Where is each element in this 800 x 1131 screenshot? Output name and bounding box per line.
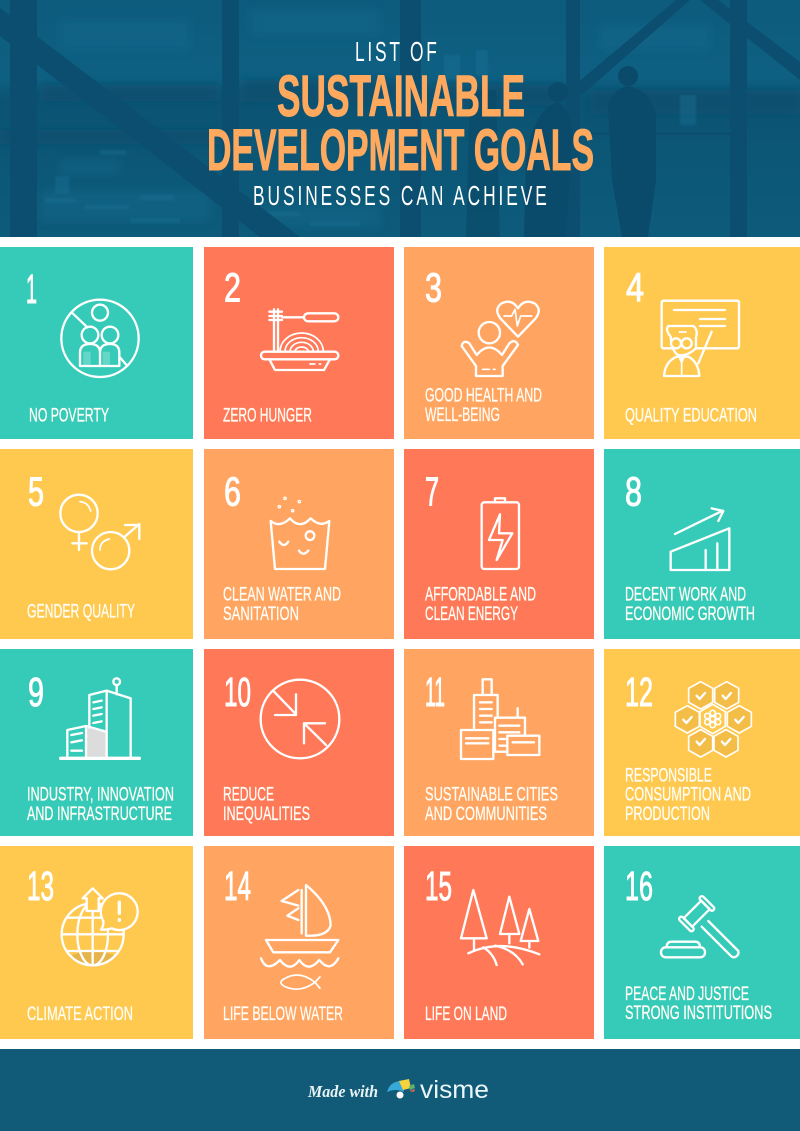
number 14: 14 — [224, 863, 251, 909]
label: RESPONSIBLE — [625, 766, 712, 787]
card 12: responsible consumption and production — [604, 649, 800, 836]
icon: crossed-out people — [61, 300, 139, 377]
label line 2: AND INFRASTRUCTURE — [27, 804, 172, 825]
label: SUSTAINABLE CITIES — [425, 785, 558, 806]
label: GOOD HEALTH AND — [425, 386, 542, 407]
card 16: peace and justice strong institutions — [604, 846, 800, 1039]
card 9: industry, innovation and infrastructure — [0, 649, 193, 836]
card 11: sustainable cities and communities: 11 — [425, 669, 445, 715]
title line: list of: LIST OF — [355, 36, 437, 67]
silhouettes of two people — [466, 66, 656, 237]
label: GENDER QUALITY — [27, 602, 135, 623]
number 6: 6 — [224, 468, 241, 514]
label: LIFE ON LAND — [425, 1004, 507, 1025]
icon: person and heart — [462, 302, 539, 376]
label: INDUSTRY, INNOVATION — [27, 785, 174, 806]
footer bar — [0, 1049, 800, 1131]
label: REDUCE — [223, 785, 274, 806]
header photo banner — [0, 0, 800, 237]
number 12: 12 — [625, 669, 653, 715]
label: CLIMATE ACTION — [27, 1004, 133, 1025]
structural beams — [0, 0, 800, 237]
icon: gender symbols — [60, 495, 139, 569]
icon: water basin — [271, 498, 329, 569]
icon: noodles and fork — [261, 309, 338, 370]
label line 2: CLEAN ENERGY — [425, 604, 518, 625]
card 2: zero hunger — [204, 247, 394, 439]
card 6: clean water and sanitation — [204, 449, 394, 639]
number 7: 7 — [425, 468, 439, 514]
card 3: good health and well-being — [404, 247, 594, 439]
card 10: reduce inequalities — [204, 649, 394, 836]
label line 2: SANITATION — [223, 604, 299, 625]
icon: office buildings — [61, 678, 139, 758]
icon: growth chart — [671, 508, 729, 570]
number 15: 15 — [425, 863, 452, 909]
icon: honeycomb of checks — [675, 682, 751, 757]
icon: teacher and board — [662, 301, 739, 376]
number 4: 4 — [626, 264, 644, 310]
made with credit: Made with — [307, 1082, 378, 1101]
number 16: 16 — [625, 863, 653, 909]
label line 2: WELL-BEING — [425, 405, 500, 426]
card 4: quality education — [604, 247, 800, 439]
number 10: 10 — [224, 669, 251, 715]
title line: businesses can achieve: BUSINESSES CAN ACHIEVE — [253, 180, 547, 211]
icon: globe with alert — [62, 888, 138, 966]
card 13: climate action — [0, 846, 193, 1039]
card 11: sustainable cities and communities — [404, 649, 594, 836]
card 7: affordable and clean energy — [404, 449, 594, 639]
label: NO POVERTY — [29, 406, 109, 426]
card 8: decent work and economic growth — [604, 449, 800, 639]
number 5: 5 — [28, 468, 44, 514]
icon: converging arrows — [261, 680, 339, 758]
icon: boat and fish — [261, 885, 338, 989]
card 14: life below water — [204, 846, 394, 1039]
label: CLEAN WATER AND — [223, 585, 341, 606]
card 5: gender quality — [0, 449, 193, 639]
icon: visme logo — [387, 1079, 415, 1098]
visme wordmark: visme — [420, 1076, 489, 1104]
icon: battery — [482, 498, 519, 569]
label line 3: PRODUCTION — [625, 804, 710, 825]
title — [207, 36, 594, 211]
icon: city blocks — [461, 679, 539, 759]
label: ZERO HUNGER — [223, 406, 312, 426]
icon: gavel — [661, 895, 739, 957]
icon: trees on a hill — [461, 890, 539, 965]
number 9: 9 — [28, 669, 44, 715]
number 2: 2 — [224, 264, 241, 310]
title line: sustainable: SUSTAINABLE — [277, 64, 525, 129]
number 13: 13 — [27, 863, 54, 909]
number 3: 3 — [425, 264, 442, 310]
card 1: no poverty: 1 — [26, 266, 37, 312]
label: LIFE BELOW WATER — [223, 1004, 343, 1025]
label line 2: AND COMMUNITIES — [425, 804, 547, 825]
label line 2: INEQUALITIES — [223, 804, 310, 825]
label: AFFORDABLE AND — [425, 585, 536, 606]
card 15: life on land — [404, 846, 594, 1039]
card 1: no poverty — [0, 247, 193, 439]
number 8: 8 — [625, 468, 642, 514]
